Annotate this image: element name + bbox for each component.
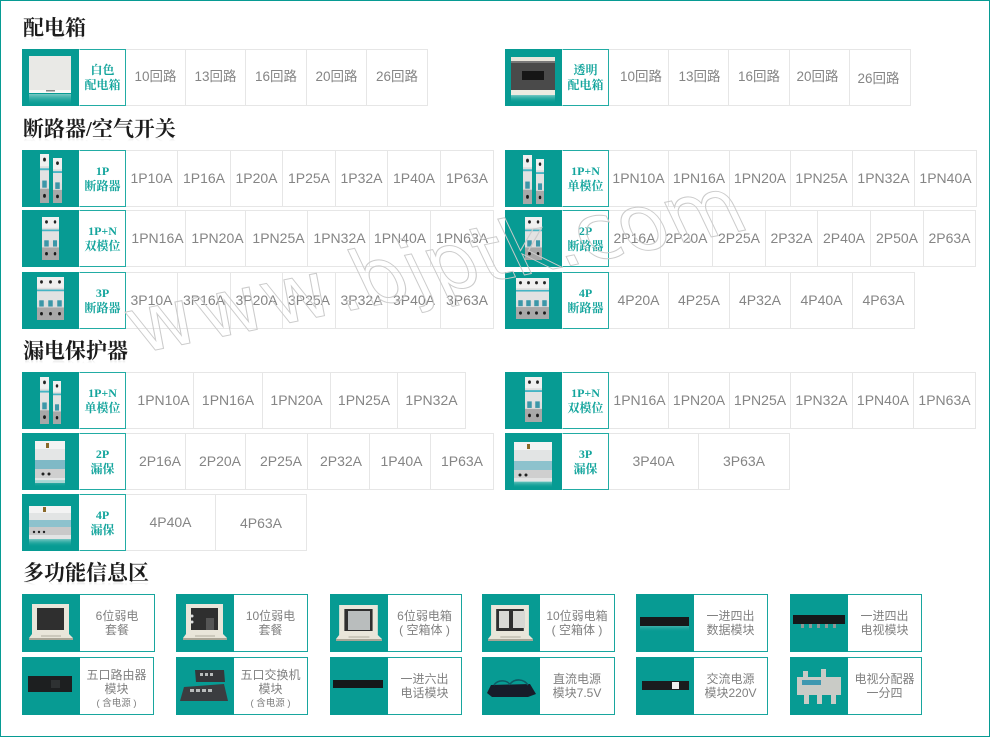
text: 一进四出电视模块: 电视模块 <box>860 623 908 637</box>
icon: 6-slot empty box <box>330 594 388 652</box>
options: 2P漏保: 2P16A <box>139 453 181 469</box>
text: 10位弱电套餐: 套餐 <box>258 623 282 637</box>
icon: 3P RCD <box>505 433 562 490</box>
text: 一进六出电话模块 <box>400 672 448 700</box>
row: 2P断路器 <box>505 210 976 267</box>
options: 4P漏保 <box>126 494 307 551</box>
text: 电视分配器一分四: 电视分配器 <box>854 672 914 686</box>
text: 10位弱电箱空箱体: ( 空箱体 ) <box>552 623 602 637</box>
label: 1P+N双模位: 双模位 <box>84 238 120 252</box>
options: 1P断路器: 1P40A <box>393 170 435 186</box>
text: 6位弱电套餐 <box>96 608 138 637</box>
icon: switch module <box>176 657 234 715</box>
label: 2P断路器: 2P <box>579 224 592 238</box>
options: 4P断路器: 4P20A <box>617 292 660 308</box>
module: 一进四出数据模块 <box>636 594 768 652</box>
icon: 10-slot low voltage box <box>176 594 234 652</box>
text: 直流电源模块7.5V: 直流电源 <box>553 672 601 686</box>
options: 1P断路器: 1P63A <box>446 170 488 186</box>
options: 1P断路器 <box>126 150 494 207</box>
icon: 4P RCD <box>22 494 79 551</box>
options: 2P断路器: 2P50A <box>876 230 918 246</box>
options: 3P断路器: 3P16A <box>183 292 225 308</box>
options: 1P+N双模位漏保: 1PN63A <box>918 392 971 408</box>
text: 一进四出数据模块 <box>706 608 754 637</box>
options: 1P断路器: 1P32A <box>340 170 383 186</box>
options: 1P+N单模位 <box>609 150 977 207</box>
row: 4P断路器 <box>505 272 915 329</box>
options: 白色配电箱回路: 13回路 <box>194 69 237 84</box>
text: 6位弱电箱空箱体: ( 空箱体 ) <box>399 623 450 637</box>
text: 交流电源模块220V: 交流电源 <box>706 672 754 686</box>
options: 1P+N双模位: 1PN32A <box>313 230 366 246</box>
row: 白色配电箱 <box>22 49 428 106</box>
row: 1P+N双模位漏保 <box>505 372 976 429</box>
module: 电视分配器一分四 <box>790 657 922 715</box>
label: 透明配电箱 <box>562 49 609 106</box>
icon: 1P breakers <box>22 150 79 207</box>
text: 五口路由器模块: 五口路由器 <box>86 668 146 682</box>
options: 4P断路器: 4P40A <box>800 292 843 308</box>
label: 1P+N单模位 <box>562 150 609 207</box>
options: 1P+N单模位: 1PN25A <box>795 170 848 186</box>
icon: AC power module <box>636 657 694 715</box>
heading: 断路器/空气开关: 断路器/空气开关 <box>23 117 176 141</box>
options: 4P漏保: 4P63A <box>240 515 282 531</box>
label: 3P断路器: 断路器 <box>84 300 120 314</box>
text: 10位弱电套餐: 10位弱电 <box>246 608 295 622</box>
options: 1P+N双模位: 1PN16A <box>131 230 184 246</box>
icon: 2P breaker <box>505 210 562 267</box>
icon: 1P+N double module RCD <box>505 372 562 429</box>
options: 3P断路器: 3P10A <box>130 292 173 308</box>
icon: white distribution box <box>22 49 79 106</box>
options: 2P漏保: 1P63A <box>441 453 483 469</box>
text: 6位弱电套餐: 套餐 <box>105 623 129 637</box>
options: 透明配电箱回路: 20回路 <box>796 69 839 84</box>
text: 直流电源模块7.5V: 模块7.5V <box>553 686 601 700</box>
options: 2P断路器 <box>609 210 976 267</box>
options: 3P断路器: 3P40A <box>393 292 435 308</box>
heading: 漏电保护器: 漏电保护器 <box>23 339 128 363</box>
label: 2P漏保: 2P <box>96 446 109 460</box>
options: 1P+N双模位漏保 <box>609 372 976 429</box>
options: 3P断路器: 3P25A <box>288 292 330 308</box>
options: 4P断路器: 4P25A <box>678 292 720 308</box>
options: 3P漏保: 3P63A <box>723 453 765 469</box>
options: 1P+N单模位漏保: 1PN25A <box>338 392 390 408</box>
text: 6位弱电箱空箱体: 6位弱电箱 <box>397 608 452 622</box>
module: 一进六出电话模块 <box>330 657 462 715</box>
module: 10位弱电套餐 <box>176 594 308 652</box>
options: 透明配电箱回路: 16回路 <box>738 69 780 84</box>
label: 1P+N双模位: 1P+N <box>88 224 117 238</box>
module: 10位弱电箱空箱体 <box>482 594 615 652</box>
icon: 2P RCD <box>22 433 79 490</box>
options: 透明配电箱回路: 10回路 <box>620 69 662 84</box>
options: 透明配电箱回路: 26回路 <box>857 71 900 86</box>
icon: data module <box>636 594 694 652</box>
options: 1P+N双模位漏保: 1PN32A <box>795 392 848 408</box>
icon: 4P breaker <box>505 272 562 329</box>
options: 3P断路器: 3P20A <box>235 292 278 308</box>
options: 1P+N单模位: 1PN32A <box>857 170 910 186</box>
text: 交流电源模块220V: 模块220V <box>704 686 757 700</box>
options: 1P+N双模位 <box>126 210 494 267</box>
text: 一进四出数据模块: 一进四出 <box>706 608 754 622</box>
row: 1P+N双模位断路器 <box>22 210 494 267</box>
label: 3P断路器 <box>79 272 126 329</box>
row: 3P漏保 <box>505 433 790 490</box>
icon: 10-slot empty box <box>482 594 540 652</box>
options: 1P+N双模位: 1PN40A <box>374 230 426 246</box>
label: 1P+N单模位漏保: 单模位 <box>84 400 120 414</box>
icon: transparent distribution box <box>505 49 562 106</box>
text: 五口路由器模块 <box>86 668 146 709</box>
text: 6位弱电箱空箱体 <box>397 608 452 637</box>
text: 五口路由器模块: 模块 <box>104 682 128 696</box>
label: 1P+N单模位: 1P+N <box>571 164 600 178</box>
text: 五口路由器模块: ( 含电源 ) <box>96 698 137 709</box>
row: 3P断路器 <box>22 272 494 329</box>
options: 1P+N双模位漏保: 1PN20A <box>673 392 725 408</box>
text: 10位弱电箱空箱体: 10位弱电箱 <box>546 608 608 622</box>
text: 电视分配器一分四 <box>854 672 914 700</box>
label: 4P断路器 <box>562 272 609 329</box>
icon: 1P+N double module breaker <box>22 210 79 267</box>
text: 一进四出数据模块: 数据模块 <box>706 623 754 637</box>
options: 3P断路器: 3P63A <box>446 292 488 308</box>
options: 1P+N双模位: 1PN20A <box>191 230 244 246</box>
label: 1P+N双模位漏保: 双模位 <box>567 400 604 414</box>
options: 白色配电箱回路: 26回路 <box>376 69 418 84</box>
label: 3P漏保: 漏保 <box>573 462 598 476</box>
label: 1P+N单模位漏保: 1P+N <box>88 386 117 400</box>
options: 1P+N单模位漏保: 1PN16A <box>202 392 254 408</box>
options: 白色配电箱回路: 20回路 <box>315 69 358 84</box>
text: 交流电源模块220V <box>704 672 757 700</box>
row: 2P漏保 <box>22 433 494 490</box>
text: 电视分配器一分四: 一分四 <box>866 686 902 700</box>
icon: 6-slot low voltage box <box>22 594 80 652</box>
module: 6位弱电箱空箱体 <box>330 594 462 652</box>
label: 1P+N双模位漏保: 1P+N <box>571 386 600 400</box>
heading: 配电箱: 配电箱 <box>23 16 86 40</box>
text: 直流电源模块7.5V <box>553 672 602 700</box>
label: 1P断路器: 1P <box>96 164 109 178</box>
icon: phone module <box>330 657 388 715</box>
label: 3P漏保: 3P <box>579 446 592 460</box>
text: 一进六出电话模块: 一进六出 <box>400 672 448 686</box>
options: 1P+N单模位: 1PN16A <box>673 170 725 186</box>
options: 透明配电箱回路 <box>609 49 911 106</box>
options: 1P+N双模位: 1PN25A <box>252 230 305 246</box>
text: 五口交换机模块 <box>240 668 300 709</box>
row: 1P断路器 <box>22 150 494 207</box>
row: 透明配电箱 <box>505 49 911 106</box>
text: 五口交换机模块: ( 含电源 ) <box>250 698 291 709</box>
module: 一进四出电视模块 <box>790 594 922 652</box>
options: 白色配电箱回路: 10回路 <box>134 69 177 84</box>
icon: TV splitter <box>790 657 848 715</box>
text: 五口交换机模块: 模块 <box>258 682 282 696</box>
icon: 1P+N single module RCD <box>22 372 79 429</box>
label: 透明配电箱: 透明 <box>573 62 598 76</box>
icon: TV module <box>790 594 848 652</box>
options: 4P漏保: 4P40A <box>149 514 192 530</box>
options: 1P+N双模位漏保: 1PN25A <box>734 392 786 408</box>
options: 2P漏保: 2P32A <box>320 453 362 469</box>
text: 10位弱电套餐 <box>246 608 295 637</box>
options: 4P断路器 <box>609 272 915 329</box>
label: 1P+N双模位漏保 <box>562 372 609 429</box>
options: 1P+N单模位漏保: 1PN10A <box>137 392 190 408</box>
label: 2P断路器: 断路器 <box>567 238 604 252</box>
text: 五口交换机模块: 五口交换机 <box>240 668 300 682</box>
icon: DC power module <box>482 657 540 715</box>
options: 白色配电箱回路: 16回路 <box>255 69 297 84</box>
module: 直流电源模块7.5V <box>482 657 615 715</box>
text: 6位弱电套餐: 6位弱电 <box>96 608 138 622</box>
label: 1P断路器: 断路器 <box>84 178 120 192</box>
options: 1P+N单模位: 1PN10A <box>612 170 665 186</box>
options: 2P漏保 <box>126 433 494 490</box>
options: 1P断路器: 1P25A <box>288 170 330 186</box>
options: 2P断路器: 2P25A <box>718 230 760 246</box>
options: 4P断路器: 4P32A <box>739 292 781 308</box>
text: 一进四出电视模块 <box>860 608 908 637</box>
heading: 多功能信息区: 多功能信息区 <box>23 561 149 585</box>
label: 白色配电箱 <box>79 49 126 106</box>
options: 1P+N单模位漏保: 1PN32A <box>405 392 458 408</box>
options: 2P漏保: 2P20A <box>199 453 241 469</box>
options: 1P+N单模位漏保 <box>126 372 466 429</box>
row: 4P漏保 <box>22 494 307 551</box>
label: 白色配电箱: 白色 <box>90 62 114 76</box>
module: 五口交换机模块 <box>176 657 308 715</box>
module: 6位弱电套餐 <box>22 594 155 652</box>
label: 1P断路器 <box>79 150 126 207</box>
label: 4P漏保 <box>79 494 126 551</box>
label: 3P漏保 <box>562 433 609 490</box>
text: 一进六出电话模块: 电话模块 <box>400 686 448 700</box>
label: 3P断路器: 3P <box>96 286 109 300</box>
options: 4P断路器: 4P63A <box>862 292 905 308</box>
options: 2P断路器: 2P40A <box>823 230 865 246</box>
options: 1P+N单模位漏保: 1PN20A <box>270 392 323 408</box>
label: 1P+N单模位漏保 <box>79 372 126 429</box>
options: 白色配电箱回路 <box>126 49 428 106</box>
options: 1P断路器: 1P20A <box>235 170 278 186</box>
icon: router module <box>22 657 80 715</box>
options: 2P断路器: 2P32A <box>770 230 813 246</box>
text: 一进四出电视模块: 一进四出 <box>860 608 908 622</box>
module: 五口路由器模块 <box>22 657 154 715</box>
label: 透明配电箱: 配电箱 <box>567 78 604 92</box>
label: 2P漏保 <box>79 433 126 490</box>
label: 白色配电箱: 配电箱 <box>84 78 120 92</box>
options: 透明配电箱回路: 13回路 <box>678 69 721 84</box>
options: 2P断路器: 2P20A <box>665 230 708 246</box>
label: 4P断路器: 断路器 <box>567 300 604 314</box>
options: 2P断路器: 2P63A <box>928 230 971 246</box>
label: 1P+N双模位 <box>79 210 126 267</box>
options: 2P断路器: 2P16A <box>613 230 656 246</box>
options: 1P断路器: 1P10A <box>130 170 173 186</box>
options: 3P漏保 <box>609 433 790 490</box>
label: 2P断路器 <box>562 210 609 267</box>
options: 1P+N单模位: 1PN40A <box>919 170 972 186</box>
options: 3P断路器 <box>126 272 494 329</box>
options: 1P+N双模位漏保: 1PN40A <box>857 392 909 408</box>
row: 1P+N单模位断路器 <box>505 150 977 207</box>
label: 4P漏保: 漏保 <box>90 522 114 536</box>
options: 1P+N双模位: 1PN63A <box>436 230 488 246</box>
options: 2P漏保: 2P25A <box>260 453 302 469</box>
options: 1P+N单模位: 1PN20A <box>734 170 786 186</box>
row: 1P+N单模位漏保 <box>22 372 466 429</box>
module: 交流电源模块220V <box>636 657 768 715</box>
options: 3P断路器: 3P32A <box>340 292 383 308</box>
options: 3P漏保: 3P40A <box>632 453 675 469</box>
options: 1P断路器: 1P16A <box>183 170 225 186</box>
options: 2P漏保: 1P40A <box>380 453 423 469</box>
label: 4P断路器: 4P <box>579 286 592 300</box>
watermark: www.bjptk.com: www.bjptk.com <box>109 161 760 370</box>
label: 1P+N单模位: 单模位 <box>567 178 604 192</box>
text: 10位弱电箱空箱体 <box>546 608 608 637</box>
label: 2P漏保: 漏保 <box>90 462 114 476</box>
label: 4P漏保: 4P <box>96 508 109 522</box>
options: 1P+N双模位漏保: 1PN16A <box>613 392 666 408</box>
icon: 1P+N single module breakers <box>505 150 562 207</box>
icon: 3P breaker <box>22 272 79 329</box>
